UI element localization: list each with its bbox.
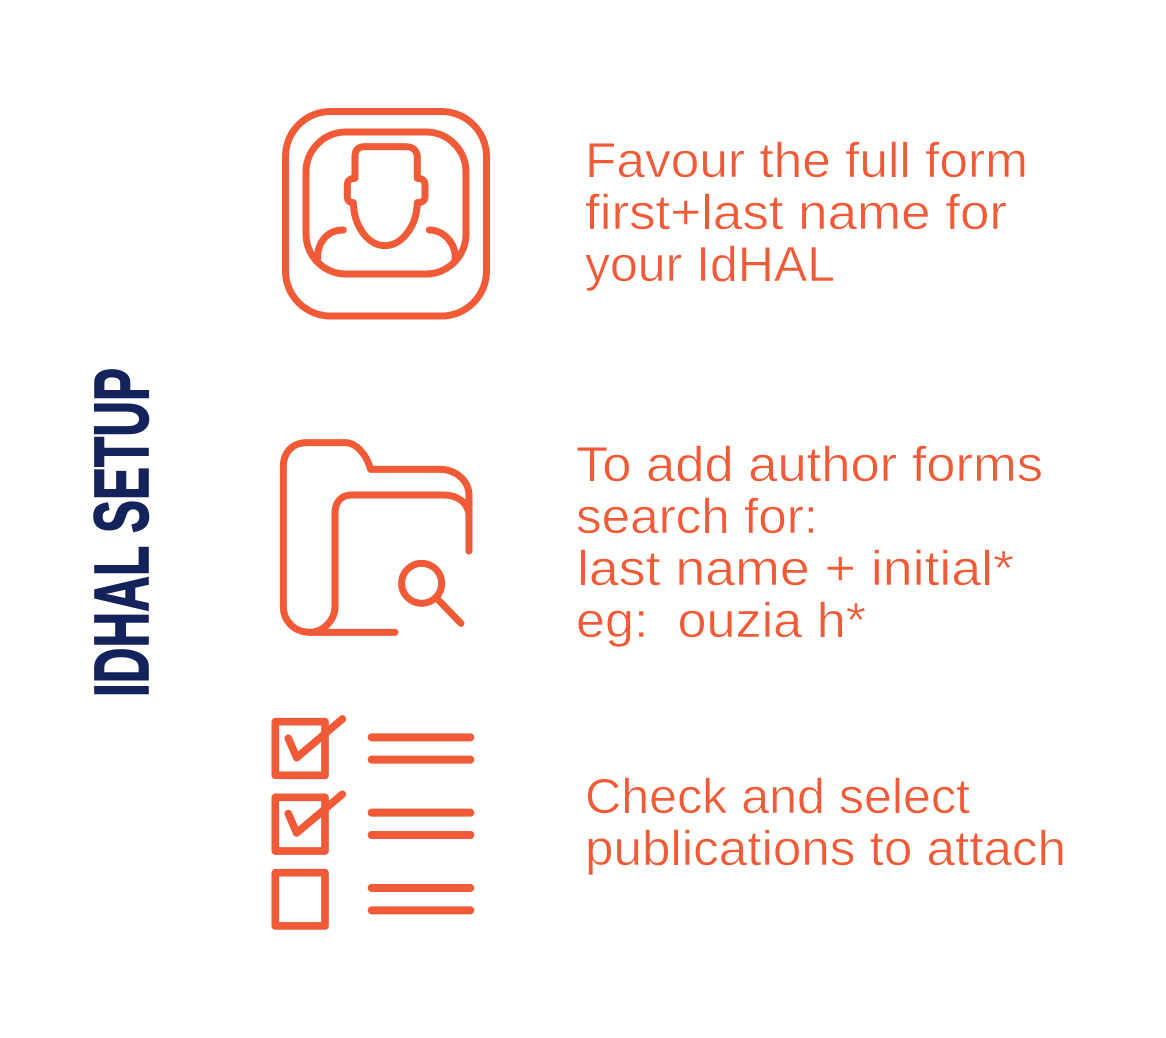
text block: adding author forms: last name + initial* — [577, 542, 1014, 596]
text block: adding author forms: search for: — [576, 490, 818, 544]
title: IDHAL SETUP (vertical): IDHAL SETUP — [79, 368, 165, 697]
icon: folder with magnifying glass — [283, 443, 469, 632]
text block: full form advice: Favour the full form — [585, 134, 1028, 188]
text block: full form advice: first+last name for — [585, 186, 1007, 240]
icon: user profile portrait — [286, 112, 486, 316]
text block: adding author forms: eg: ouzia h* — [576, 594, 866, 648]
text block: check and select publications — [585, 770, 1066, 876]
text block: full form advice: your IdHAL — [585, 238, 835, 292]
text block: adding author forms: To add author forms — [576, 438, 1043, 492]
text block: adding author forms — [576, 438, 1043, 648]
text block: check and select publications: publications to attach — [585, 822, 1066, 876]
text block: check and select publications: Check and select — [585, 770, 970, 824]
text block: full form advice — [585, 134, 1028, 292]
icon: checklist — [275, 719, 470, 926]
